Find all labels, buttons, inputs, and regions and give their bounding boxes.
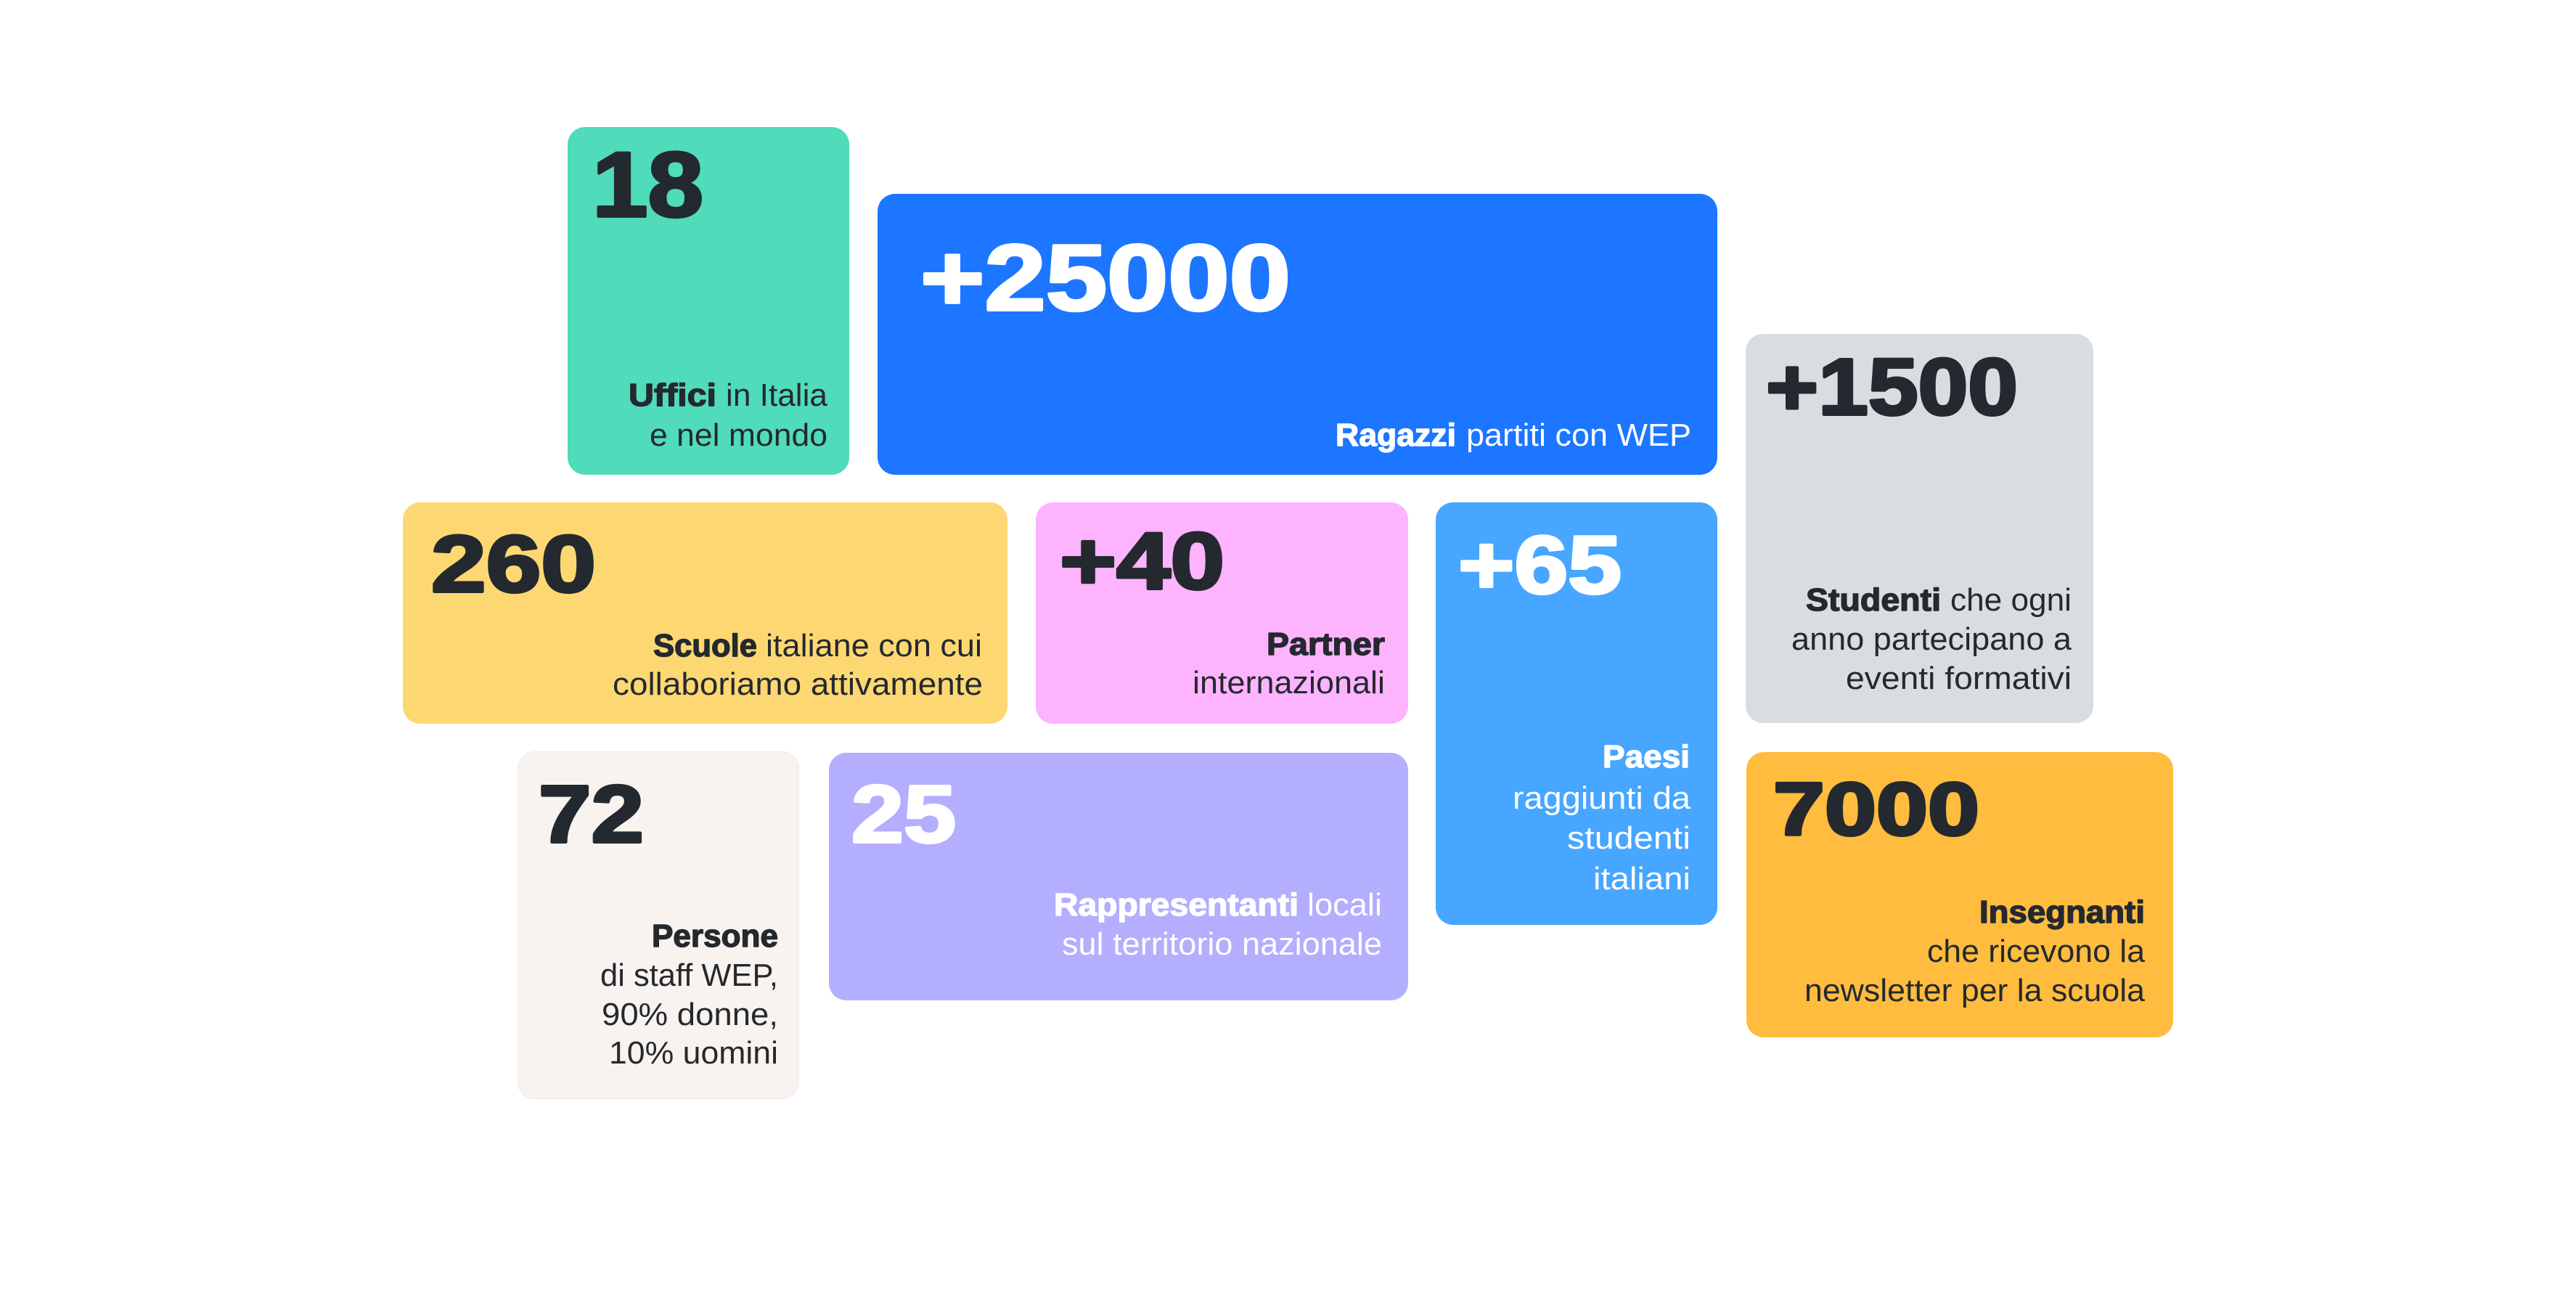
label: Persone bbox=[652, 918, 778, 954]
label bbox=[629, 377, 828, 453]
label: internazionali bbox=[1193, 665, 1385, 701]
panel: +40 partner bbox=[1036, 502, 1408, 724]
label: Partner bbox=[1267, 626, 1385, 662]
number: +40 bbox=[1060, 516, 1224, 606]
card background bbox=[1746, 752, 2173, 1037]
label bbox=[1791, 582, 2072, 696]
panel: +25000 ragazzi bbox=[878, 194, 1717, 475]
panel: +65 paesi bbox=[1436, 502, 1717, 925]
label bbox=[1193, 626, 1385, 701]
label: di staff WEP, bbox=[600, 958, 778, 993]
panel: 72 persone bbox=[518, 752, 798, 1099]
label bbox=[613, 628, 983, 702]
card background bbox=[1436, 502, 1717, 925]
label: newsletter per la scuola bbox=[1804, 973, 2146, 1008]
label: che ricevono la bbox=[1927, 934, 2146, 969]
label: studenti bbox=[1567, 820, 1690, 856]
label: Paesi bbox=[1603, 739, 1690, 775]
label bbox=[1804, 894, 2146, 1008]
label: Uffici bbox=[629, 377, 716, 413]
label: Rappresentanti bbox=[1054, 887, 1299, 923]
card background bbox=[1746, 334, 2093, 723]
label: in Italia bbox=[726, 377, 828, 413]
label: Scuole bbox=[653, 628, 757, 664]
card background bbox=[518, 752, 798, 1099]
label: locali bbox=[1307, 887, 1382, 923]
card background bbox=[568, 127, 849, 475]
label: Studenti bbox=[1806, 582, 1941, 618]
number: 25 bbox=[851, 769, 956, 860]
label: anno partecipano a bbox=[1791, 621, 2072, 657]
label: italiani bbox=[1593, 861, 1690, 897]
panel: 260 scuole bbox=[403, 502, 1007, 724]
label: che ogni bbox=[1950, 582, 2072, 618]
number: +25000 bbox=[920, 226, 1291, 330]
label bbox=[1336, 417, 1691, 453]
card background bbox=[1036, 502, 1408, 724]
number: +1500 bbox=[1766, 343, 2018, 432]
label: 90% donne, bbox=[602, 997, 778, 1032]
label: raggiunti da bbox=[1513, 780, 1691, 816]
panel: +1500 studenti bbox=[1746, 334, 2093, 723]
label: Insegnanti bbox=[1979, 894, 2145, 930]
card background bbox=[403, 502, 1007, 724]
panel: 7000 insegnanti bbox=[1746, 752, 2173, 1037]
card background bbox=[878, 194, 1717, 475]
label bbox=[1054, 887, 1382, 962]
number: 18 bbox=[592, 133, 703, 236]
number: 72 bbox=[539, 769, 644, 860]
number: +65 bbox=[1458, 519, 1622, 611]
label: e nel mondo bbox=[650, 417, 827, 453]
number: 7000 bbox=[1773, 767, 1979, 851]
label: partiti con WEP bbox=[1466, 417, 1691, 453]
label bbox=[600, 918, 778, 1071]
label: eventi formativi bbox=[1846, 661, 2072, 696]
label: 10% uomini bbox=[609, 1035, 778, 1071]
label: sul territorio nazionale bbox=[1062, 926, 1382, 962]
label: Ragazzi bbox=[1336, 417, 1456, 453]
label: italiane con cui bbox=[766, 628, 982, 664]
label: collaboriamo attivamente bbox=[613, 666, 983, 702]
number: 260 bbox=[431, 519, 596, 609]
label bbox=[1513, 739, 1691, 897]
panel: 18 uffici bbox=[568, 127, 849, 475]
card background bbox=[829, 753, 1408, 1000]
panel: 25 rappresentanti bbox=[829, 753, 1408, 1000]
